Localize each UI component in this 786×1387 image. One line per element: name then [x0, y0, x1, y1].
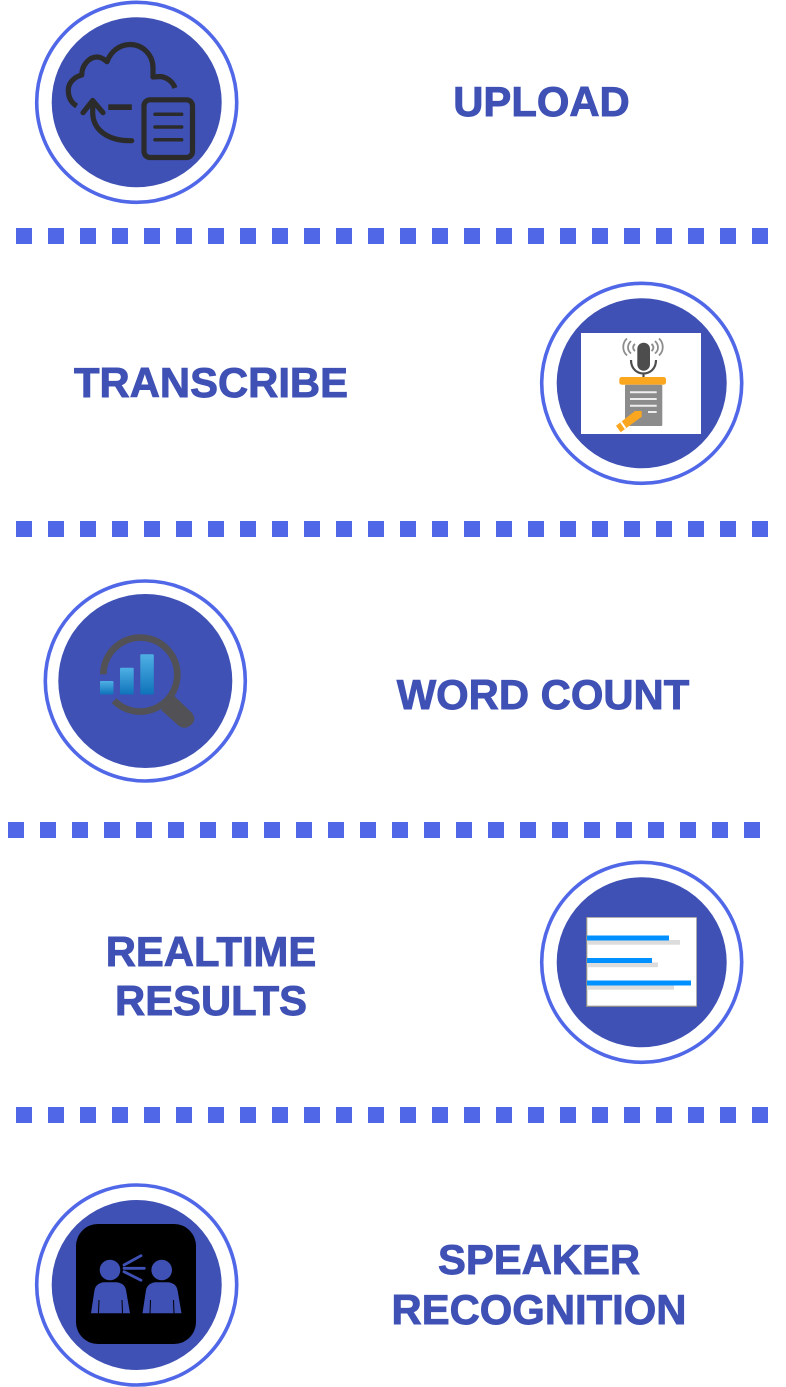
step: upload	[37, 2, 630, 202]
step: transcribe	[74, 283, 742, 483]
icon: two people talking	[37, 1185, 237, 1385]
step: speaker recognition	[37, 1185, 686, 1385]
label: realtime results: RESULTS	[115, 977, 307, 1024]
step: word count	[45, 581, 690, 781]
icon: magnifier with bars	[45, 581, 245, 781]
icon: microphone and transcript	[542, 283, 742, 483]
label: realtime results: REALTIME	[106, 928, 316, 975]
label: word count: WORD COUNT	[397, 671, 690, 718]
label: transcribe: TRANSCRIBE	[74, 359, 348, 406]
step: realtime results	[106, 862, 742, 1062]
icon: results panel	[542, 862, 742, 1062]
label: speaker recognition	[392, 1236, 686, 1333]
icon: cloud upload with document	[37, 2, 237, 202]
label: upload: UPLOAD	[453, 78, 630, 125]
label: realtime results	[106, 928, 316, 1024]
label: speaker recognition: SPEAKER	[438, 1236, 640, 1283]
label: speaker recognition: RECOGNITION	[392, 1286, 686, 1333]
